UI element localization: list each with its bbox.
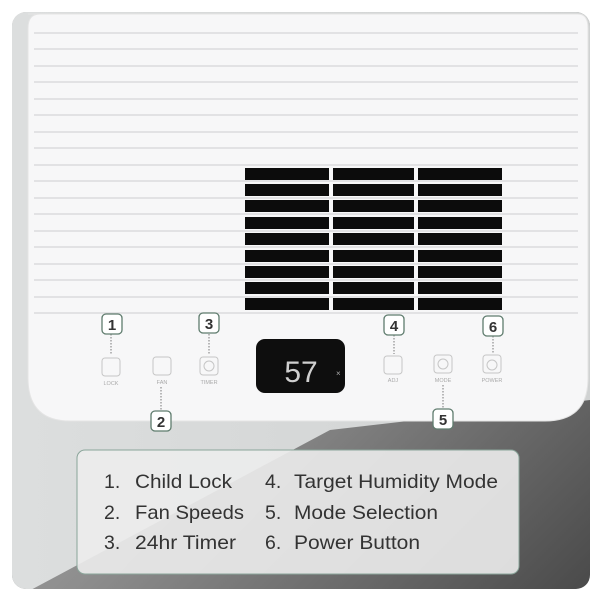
control labels [104, 378, 502, 387]
air vent slats [245, 168, 502, 310]
legend box: Fan Speeds [135, 502, 244, 524]
control labels: MODE [435, 378, 452, 384]
control labels: POWER [482, 378, 502, 384]
legend box: Target Humidity Mode [294, 471, 498, 493]
legend box: 24hr Timer [135, 532, 237, 554]
display: 57 [284, 356, 318, 389]
legend box: 1. [104, 471, 120, 493]
control labels: LOCK [104, 381, 119, 387]
control labels: TIMER [200, 380, 218, 386]
callout numbers: 5 [439, 412, 447, 429]
callout numbers: 2 [157, 414, 165, 431]
control labels: ADJ [388, 378, 398, 384]
display: × [336, 369, 341, 378]
callout numbers [102, 313, 503, 431]
legend box: 4. [265, 471, 281, 493]
legend box: Child Lock [135, 471, 232, 493]
white device panel [28, 14, 588, 421]
callout numbers: 6 [489, 319, 497, 336]
legend box [77, 450, 519, 574]
legend box: 5. [265, 502, 281, 524]
control labels: FAN [157, 380, 167, 386]
dotted connector lines [111, 334, 493, 411]
display [256, 339, 345, 393]
grille lines [34, 33, 578, 313]
control icons [102, 355, 501, 376]
callout numbers: 1 [108, 317, 116, 334]
legend box: 2. [104, 502, 120, 524]
legend box: Mode Selection [294, 502, 438, 524]
legend box: 3. [104, 532, 120, 554]
legend box: 6. [265, 532, 281, 554]
legend box: Power Button [294, 532, 420, 554]
callout numbers: 3 [205, 316, 213, 333]
callout numbers: 4 [390, 318, 399, 335]
